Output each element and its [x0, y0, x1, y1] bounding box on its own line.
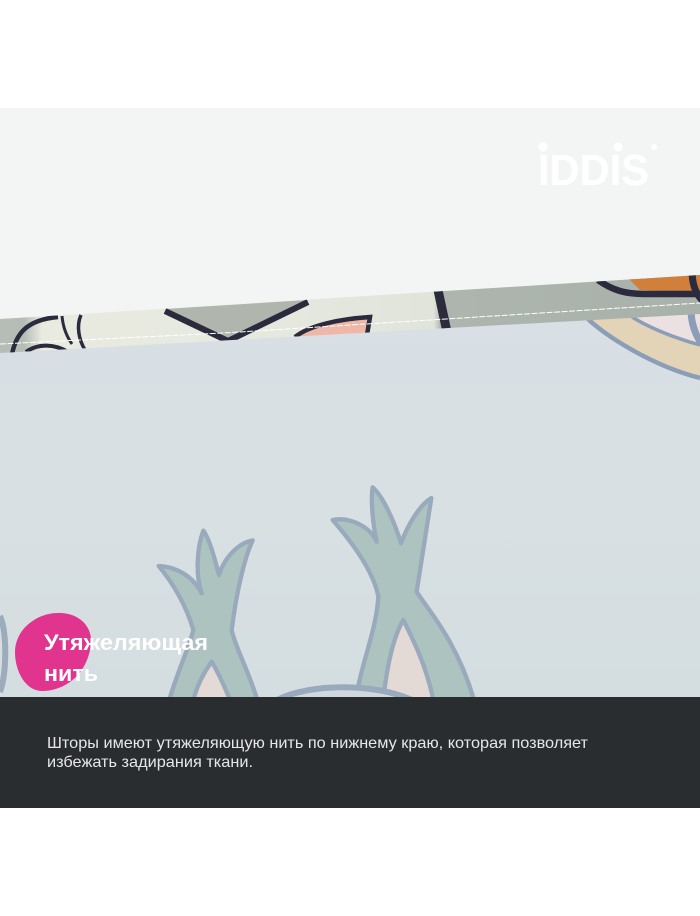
curtain hem strip	[0, 275, 700, 353]
printed left edge arc	[0, 616, 5, 692]
printed plant: left	[159, 531, 257, 700]
photo: curtain hem close-up	[0, 108, 700, 700]
printed plant: right	[333, 487, 474, 700]
curtain fabric	[0, 310, 700, 697]
grey triangle in hem	[165, 300, 308, 340]
infographic canvas	[0, 108, 700, 808]
logo: IDDIS: IDDIS	[538, 146, 649, 195]
dark caption panel	[0, 697, 700, 808]
logo dots	[538, 142, 622, 152]
registered mark	[651, 144, 657, 150]
printed ear at top right	[588, 310, 700, 378]
pink ear print	[300, 320, 368, 336]
orange print	[629, 275, 700, 291]
stitch line	[0, 303, 700, 344]
wall background	[0, 108, 700, 319]
caption text: Шторы имеют утяжеляющую нить по нижнему краю, которая позволяет	[47, 735, 589, 752]
pink accent blob	[15, 613, 91, 691]
heading: нить	[44, 661, 98, 686]
dark printed lines	[12, 270, 700, 354]
heading	[44, 630, 208, 686]
hem base colour	[0, 275, 700, 353]
caption text: избежать задирания ткани.	[47, 754, 253, 771]
caption text	[47, 735, 589, 771]
heading: Утяжеляющая	[44, 630, 208, 655]
printed body arc	[277, 687, 412, 700]
